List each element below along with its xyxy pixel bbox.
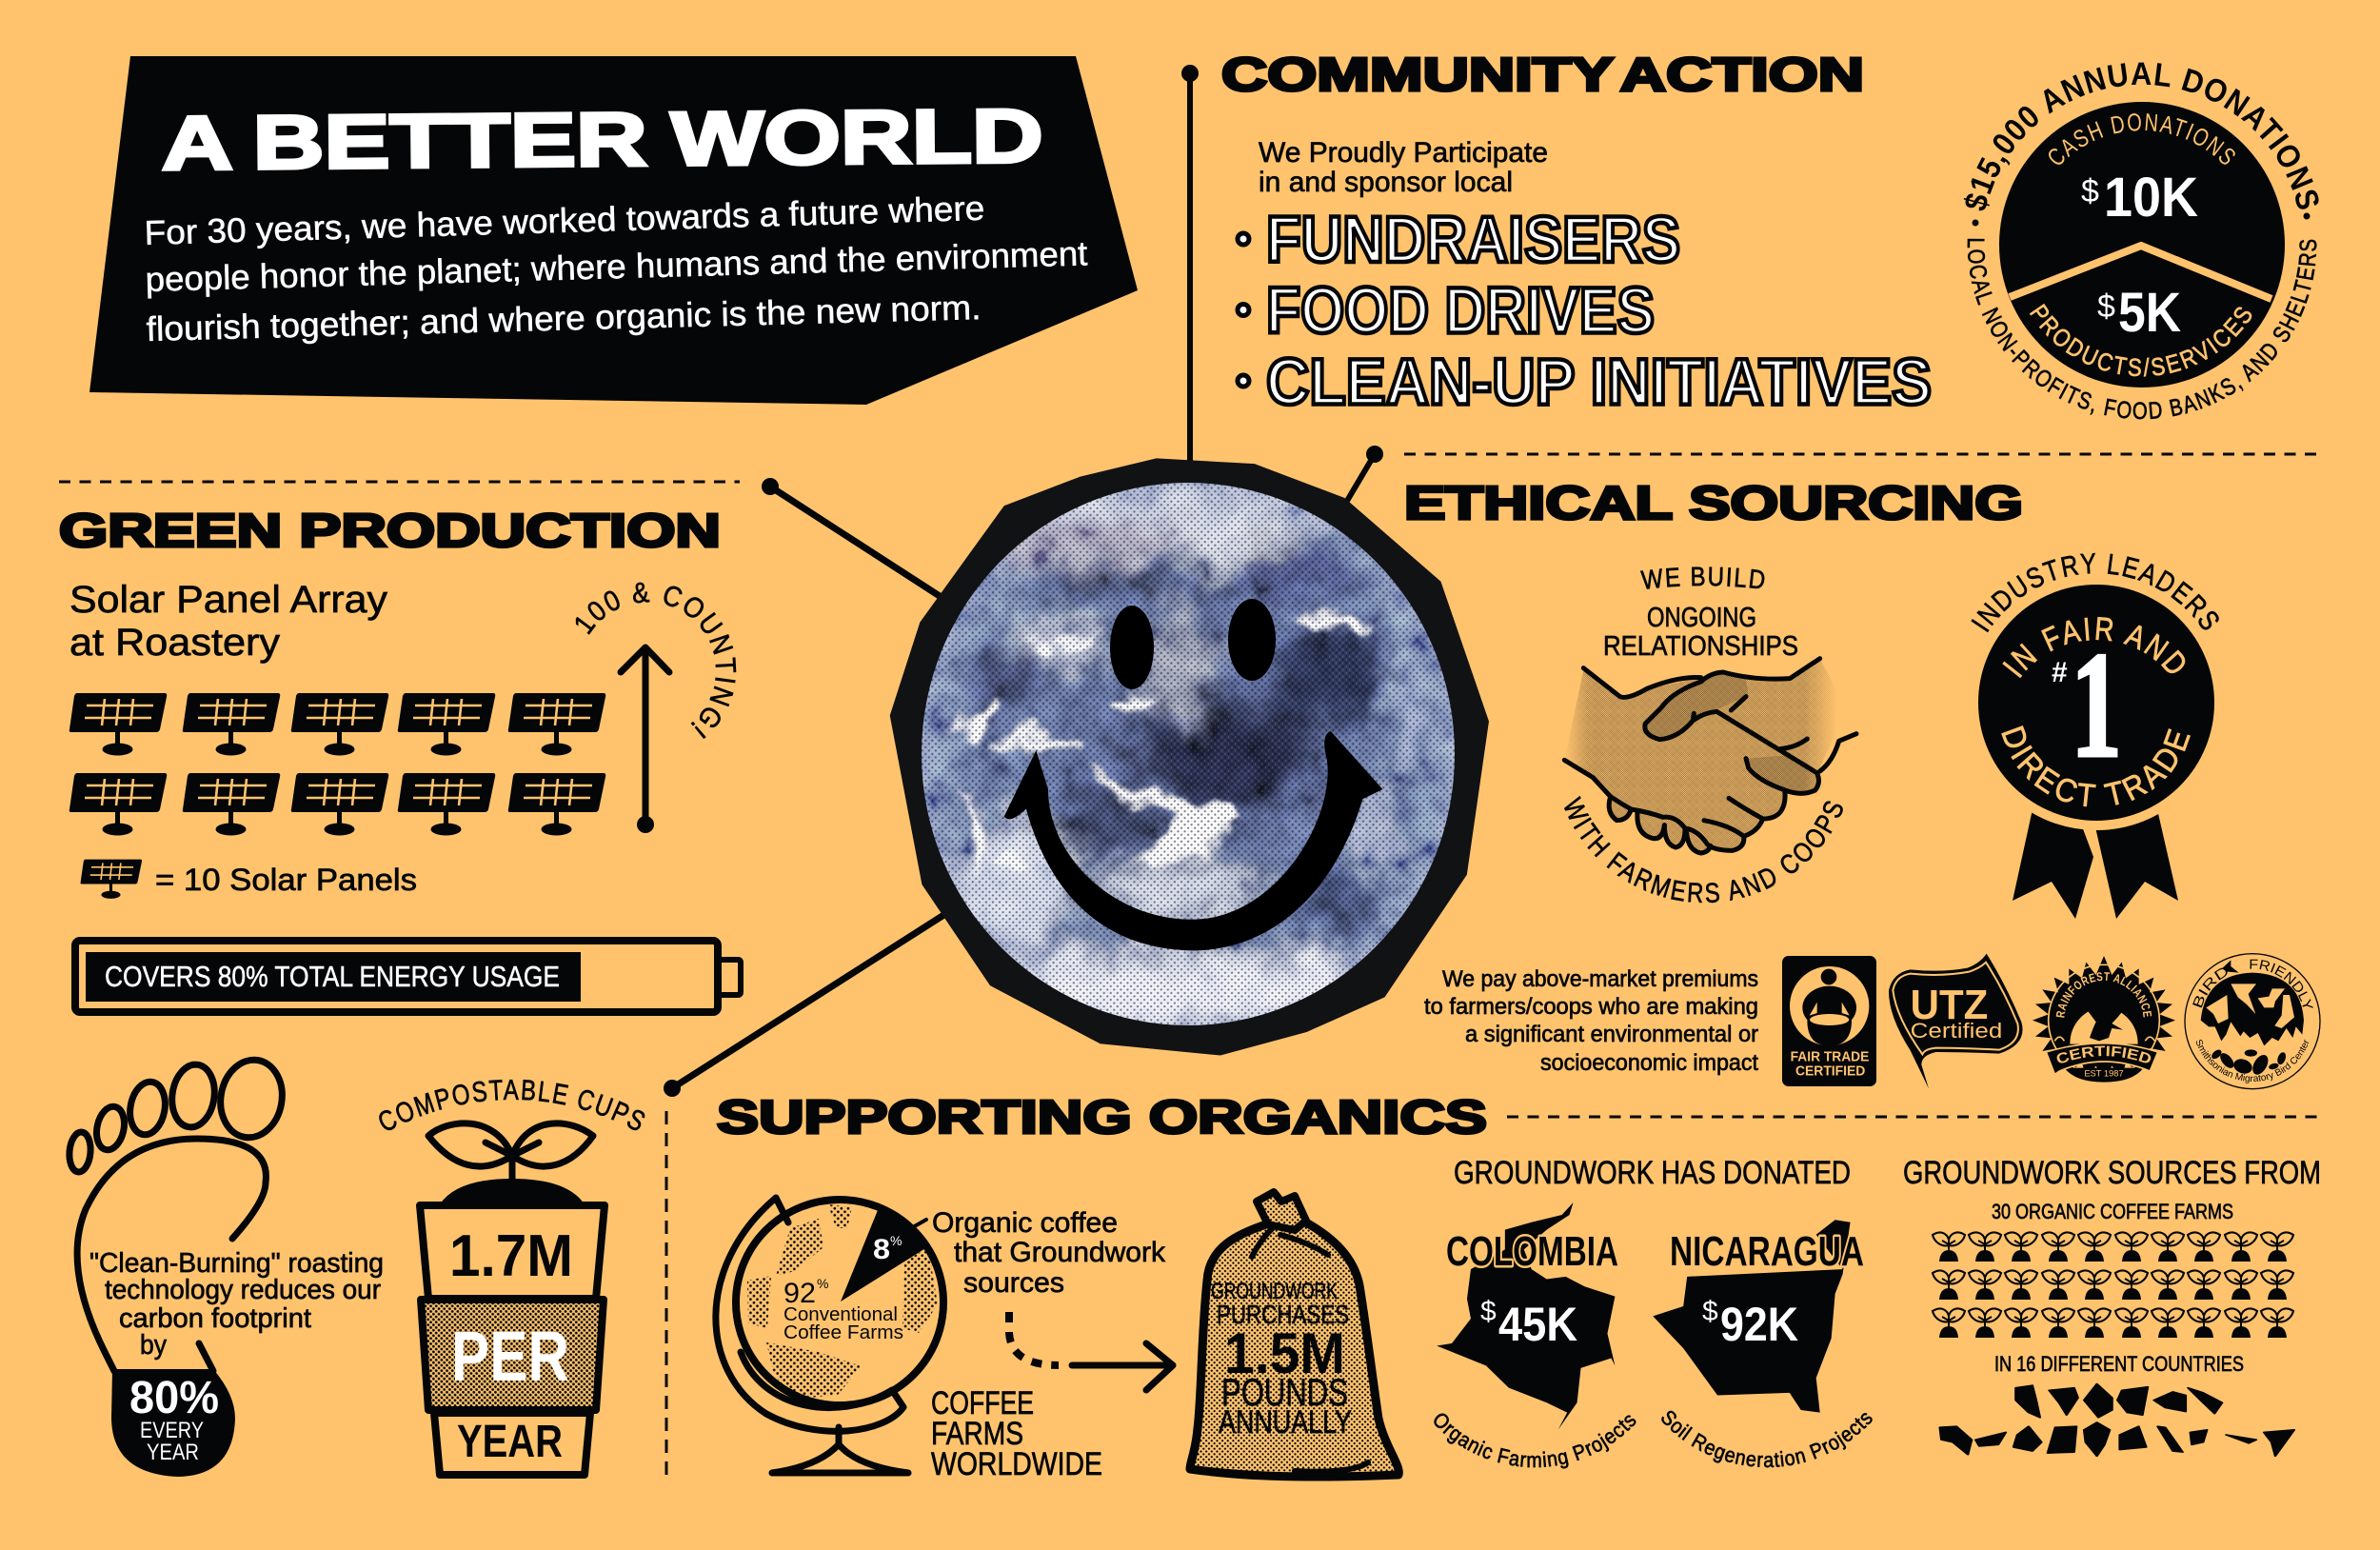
- icon: compostable cup: 1.7M: [449, 1223, 573, 1289]
- map: colombia: Organic Farming Projects: [1434, 1413, 1636, 1468]
- panel: green production: [59, 506, 744, 1479]
- logo: bird friendly: BIRD: [2192, 967, 2228, 1007]
- intro text: we proudly participate: [1259, 137, 1548, 198]
- logo: utz certified: Certified: [1911, 1019, 2002, 1043]
- text: organic coffee sources: [932, 1207, 1166, 1299]
- logo: bird friendly: FRIENDLY: [2250, 960, 2313, 1008]
- icon: coffee sack: 1.5M: [1224, 1321, 1345, 1385]
- sprout grid: [1933, 1233, 2293, 1338]
- country silhouettes: [1940, 1384, 2294, 1456]
- text: clean burning: by: [140, 1330, 167, 1361]
- arrow: dotted to bag: [1009, 1312, 1173, 1390]
- handshake caption top: ONGOING: [1647, 603, 1756, 633]
- activity list: FUNDRAISERS: [1266, 203, 1680, 276]
- solar array label: at Roastery: [69, 622, 280, 664]
- icon: globe pie: Coffee Farms: [783, 1322, 903, 1343]
- logo: fair trade certified: FAIR TRADE: [1791, 1049, 1870, 1064]
- battery: energy usage: COVERS 80% TOTAL ENERGY USAGE: [105, 960, 560, 993]
- battery: energy usage: [75, 941, 741, 1012]
- map: colombia: $: [1480, 1296, 1497, 1327]
- donations badge: $15,000 ANNUAL DONATIONS: [1963, 63, 2319, 211]
- text: clean burning: technology reduces our: [105, 1275, 381, 1305]
- icon: compostable cup: [420, 1123, 605, 1475]
- logo: fair trade certified: [1782, 956, 1876, 1086]
- map: nicaragua: $: [1702, 1296, 1718, 1327]
- text: organic coffee sources: sources: [963, 1267, 1064, 1299]
- logo: rainforest alliance: EST 1987: [2084, 1069, 2124, 1079]
- handshake caption top: [1603, 566, 1798, 662]
- logo: utz certified: UTZ: [1911, 982, 1988, 1028]
- legend: solar panels: = 10 Solar Panels: [155, 863, 417, 897]
- heading: community action: COMMUNITY ACTION: [1221, 50, 1864, 101]
- intro text: [144, 189, 1088, 348]
- section divider: ethical sourcing: [1404, 453, 2318, 455]
- panel: ethical sourcing: [1404, 478, 2321, 1089]
- map: colombia: 45K: [1498, 1298, 1577, 1351]
- map: nicaragua: 92K: [1720, 1298, 1798, 1351]
- text: organic coffee sources: that Groundwork: [954, 1237, 1166, 1268]
- activity list: FOOD DRIVES: [1266, 274, 1655, 347]
- logo: fair trade certified: CERTIFIED: [1795, 1063, 1865, 1079]
- text: coffee farms worldwide: FARMS: [931, 1416, 1023, 1452]
- panel: title banner: [89, 56, 1138, 405]
- premiums text: socioeconomic impact: [1540, 1050, 1758, 1076]
- premiums text: to farmers/coops who are making: [1424, 994, 1758, 1020]
- map: colombia: [1434, 1202, 1636, 1468]
- section divider: green production: [59, 480, 740, 484]
- icon: compostable cup: PER: [451, 1317, 569, 1396]
- donations badge: $: [2081, 173, 2099, 209]
- heading: supporting organics: SUPPORTING ORGANICS: [717, 1092, 1487, 1143]
- text: organic coffee sources: Organic coffee: [932, 1207, 1118, 1239]
- section divider: supporting organics: [1507, 1116, 2318, 1118]
- icon: coffee sack: PURCHASES: [1217, 1300, 1349, 1329]
- activity list: [1238, 203, 1932, 419]
- premiums text: We pay above-market premiums: [1442, 966, 1758, 992]
- ribbon: industry leaders: DIRECT TRADE: [2001, 725, 2191, 807]
- heading: green production: GREEN PRODUCTION: [59, 506, 721, 557]
- ribbon: industry leaders: IN FAIR AND: [2002, 617, 2186, 678]
- icon: globe pie: 92: [783, 1278, 816, 1309]
- connector: ethical sourcing: [1347, 446, 1383, 501]
- donations badge: 10K: [2104, 167, 2198, 229]
- icon: coffee sack: [1190, 1192, 1398, 1477]
- map: colombia: COLOMBIA: [1446, 1228, 1618, 1275]
- text: coffee farms worldwide: WORLDWIDE: [931, 1446, 1102, 1482]
- icon: globe pie: %: [890, 1233, 902, 1248]
- text: coffee farms worldwide: COFFEE: [931, 1385, 1034, 1421]
- text: coffee farms worldwide: [931, 1385, 1102, 1482]
- ribbon: industry leaders: [1971, 552, 2219, 919]
- label: organic coffee farms: 30 ORGANIC COFFEE FARMS: [1992, 1200, 2233, 1223]
- premiums text: a significant environmental or: [1465, 1022, 1758, 1047]
- donations badge: LOCAL NON-PROFITS, FOOD BANKS, AND SHELTERS: [1967, 238, 2317, 419]
- map: nicaragua: Soil Regeneration Projects: [1661, 1411, 1873, 1468]
- map: nicaragua: [1653, 1220, 1873, 1468]
- ribbon: industry leaders: INDUSTRY LEADERS: [1971, 552, 2219, 632]
- activity list: CLEAN-UP INITIATIVES: [1266, 345, 1932, 419]
- icon: globe pie: Conventional: [783, 1304, 898, 1325]
- logo: rainforest alliance: CERTIFIED: [2056, 1045, 2152, 1063]
- legend: solar panels: [80, 860, 417, 899]
- donations badge: CASH DONATIONS: [2049, 113, 2235, 165]
- intro text: we proudly participate: in and sponsor local: [1259, 167, 1513, 198]
- icon: handshake: [1564, 659, 1856, 853]
- intro text: we proudly participate: We Proudly Participate: [1259, 137, 1548, 169]
- icon: coffee sack: ANNUALLY: [1219, 1404, 1352, 1441]
- logo: bird friendly: Smithsonian Migratory Bird Center: [2195, 1040, 2310, 1083]
- text: clean burning: [89, 1248, 384, 1361]
- icon: coffee sack: POUNDS: [1221, 1372, 1348, 1414]
- arrow: 100 and counting: 100 & COUNTING!: [575, 583, 737, 739]
- title: A BETTER WORLD: [161, 93, 1043, 186]
- icon: footprint: YEAR: [147, 1440, 199, 1465]
- panel: supporting organics: [712, 1092, 2321, 1482]
- icon: footprint: [68, 1055, 288, 1477]
- icon: globe pie: 8: [873, 1234, 890, 1265]
- icon: coffee sack: GROUNDWORK: [1211, 1279, 1338, 1304]
- map: nicaragua: NICARAGUA: [1670, 1228, 1864, 1275]
- cup title: COMPOSTABLE CUPS: [379, 1080, 645, 1131]
- heading: ethical sourcing: ETHICAL SOURCING: [1404, 478, 2023, 529]
- icon: compostable cup: YEAR: [457, 1417, 563, 1467]
- arrow: 100 and counting: [575, 583, 737, 833]
- logo: utz certified: [1889, 954, 2023, 1088]
- icon: globe pie: %: [817, 1276, 828, 1291]
- ribbon: industry leaders: #: [2052, 657, 2068, 688]
- heading: groundwork has donated: GROUNDWORK HAS DONATED: [1454, 1155, 1851, 1191]
- section divider: vertical: [664, 1111, 668, 1476]
- handshake caption top: RELATIONSHIPS: [1603, 631, 1798, 662]
- text: clean burning: carbon footprint: [119, 1303, 311, 1334]
- icon: footprint: 80%: [129, 1373, 219, 1423]
- premiums text: [1424, 966, 1758, 1076]
- logo: rainforest alliance: RAINFOREST ALLIANCE: [2056, 972, 2152, 1018]
- handshake caption top: WE BUILD: [1639, 566, 1765, 589]
- handshake caption bottom: WITH FARMERS AND COOPS: [1563, 796, 1843, 903]
- icon: footprint: EVERY: [140, 1418, 204, 1443]
- solar array label: Solar Panel Array: [69, 579, 387, 621]
- label: different countries: IN 16 DIFFERENT COUNTRIES: [1994, 1352, 2244, 1376]
- connector: community action: [1181, 65, 1199, 467]
- donations badge: $: [2097, 288, 2115, 325]
- connector: supporting organics: [664, 914, 945, 1097]
- donations badge: 5K: [2118, 282, 2181, 344]
- ribbon: industry leaders: 1: [2071, 620, 2122, 789]
- text: clean burning: "Clean-Burning" roasting: [89, 1248, 384, 1279]
- solar array label: [69, 579, 387, 664]
- donations badge: PRODUCTS/SERVICES: [2030, 303, 2252, 377]
- intro text: flourish together; and where organic is the new norm.: [146, 288, 982, 348]
- intro text: For 30 years, we have worked towards a future where: [144, 189, 985, 252]
- icon: globe pie: [716, 1198, 943, 1473]
- solar panels grid: [69, 693, 605, 836]
- connector: green production: [762, 478, 942, 598]
- logo: bird friendly: [2184, 953, 2321, 1089]
- panel: community action: [1221, 50, 2319, 419]
- intro text: people honor the planet; where humans and the environment: [145, 233, 1088, 299]
- smiling earth: [890, 458, 1489, 1056]
- logo: rainforest alliance: [2033, 956, 2175, 1083]
- donations badge: [1963, 63, 2319, 419]
